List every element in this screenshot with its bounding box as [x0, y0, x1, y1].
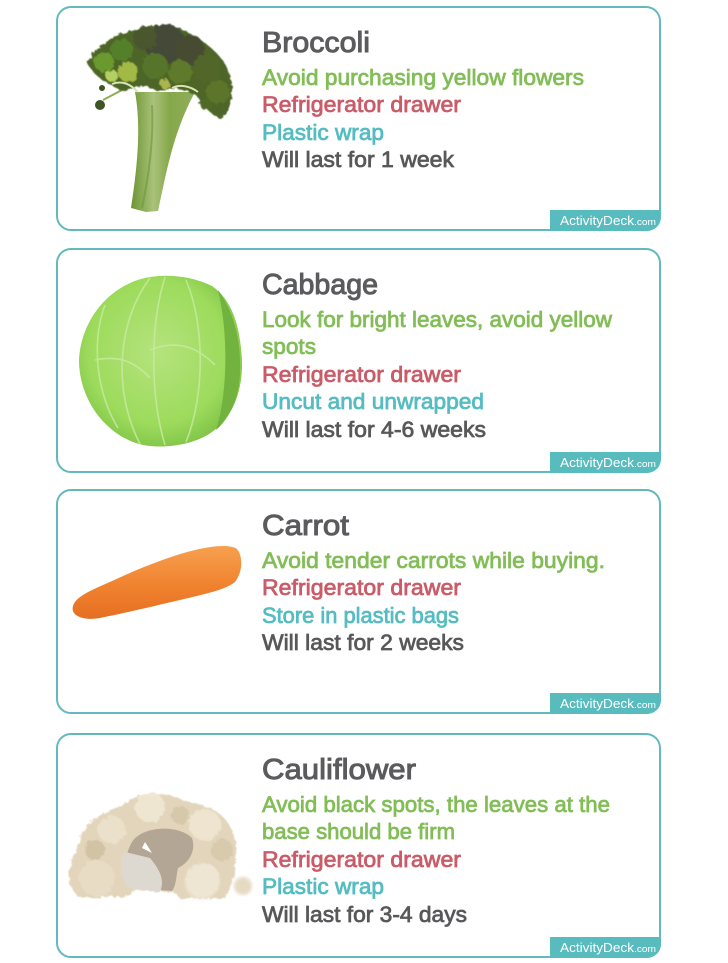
- panel: carrot: [57, 490, 661, 714]
- text: storage place: Refrigerator drawer: [262, 92, 461, 117]
- text: storage place: Refrigerator drawer: [262, 575, 461, 600]
- badge: ActivityDeck: .com: [634, 459, 656, 470]
- badge: ActivityDeck: .com: [634, 700, 656, 711]
- text: wrapping: Plastic wrap: [262, 874, 384, 899]
- panel: broccoli: [57, 7, 661, 231]
- image: carrot: [73, 546, 241, 619]
- text: storage place: Refrigerator drawer: [262, 847, 461, 872]
- title: Broccoli: Broccoli: [262, 27, 370, 59]
- text: buying tip: Look for bright leaves, avoid yellow: [262, 307, 612, 332]
- badge: ActivityDeck: .com: [634, 944, 656, 955]
- badge: ActivityDeck: ActivityDeck: [560, 941, 635, 955]
- text: shelf life: Will last for 4-6 weeks: [262, 417, 486, 442]
- text: buying tip: Avoid tender carrots while buying.: [262, 548, 605, 573]
- text: buying tip: Avoid black spots, the leaves at the: [262, 792, 610, 817]
- badge: ActivityDeck: ActivityDeck: [560, 697, 635, 711]
- badge: ActivityDeck: .com: [634, 217, 656, 228]
- image: cauliflower: [69, 792, 252, 899]
- text: buying tip: spots: [262, 334, 316, 359]
- title: Carrot: Carrot: [262, 510, 349, 542]
- text: wrapping: Plastic wrap: [262, 120, 384, 145]
- badge: ActivityDeck: ActivityDeck: [560, 456, 635, 470]
- image: cabbage: [79, 276, 242, 446]
- badge: ActivityDeck: [550, 693, 661, 714]
- text: shelf life: Will last for 1 week: [262, 147, 455, 172]
- panel: cauliflower: [57, 734, 661, 958]
- title: Cauliflower: Cauliflower: [262, 754, 416, 786]
- title: Cabbage: Cabbage: [262, 269, 378, 301]
- badge: ActivityDeck: ActivityDeck: [560, 214, 635, 228]
- text: buying tip: base should be firm: [262, 819, 455, 844]
- badge: ActivityDeck: [550, 452, 661, 473]
- text: buying tip: [262, 307, 612, 359]
- text: wrapping: Store in plastic bags: [262, 603, 459, 628]
- panel: cabbage: [57, 249, 661, 473]
- text: shelf life: Will last for 3-4 days: [262, 902, 467, 927]
- image: broccoli: [88, 24, 232, 212]
- text: wrapping: Uncut and unwrapped: [262, 389, 484, 414]
- badge: ActivityDeck: [550, 210, 661, 231]
- text: buying tip: Avoid purchasing yellow flowers: [262, 65, 584, 90]
- badge: ActivityDeck: [550, 937, 661, 958]
- text: buying tip: [262, 792, 610, 844]
- text: storage place: Refrigerator drawer: [262, 362, 461, 387]
- text: shelf life: Will last for 2 weeks: [262, 630, 464, 655]
